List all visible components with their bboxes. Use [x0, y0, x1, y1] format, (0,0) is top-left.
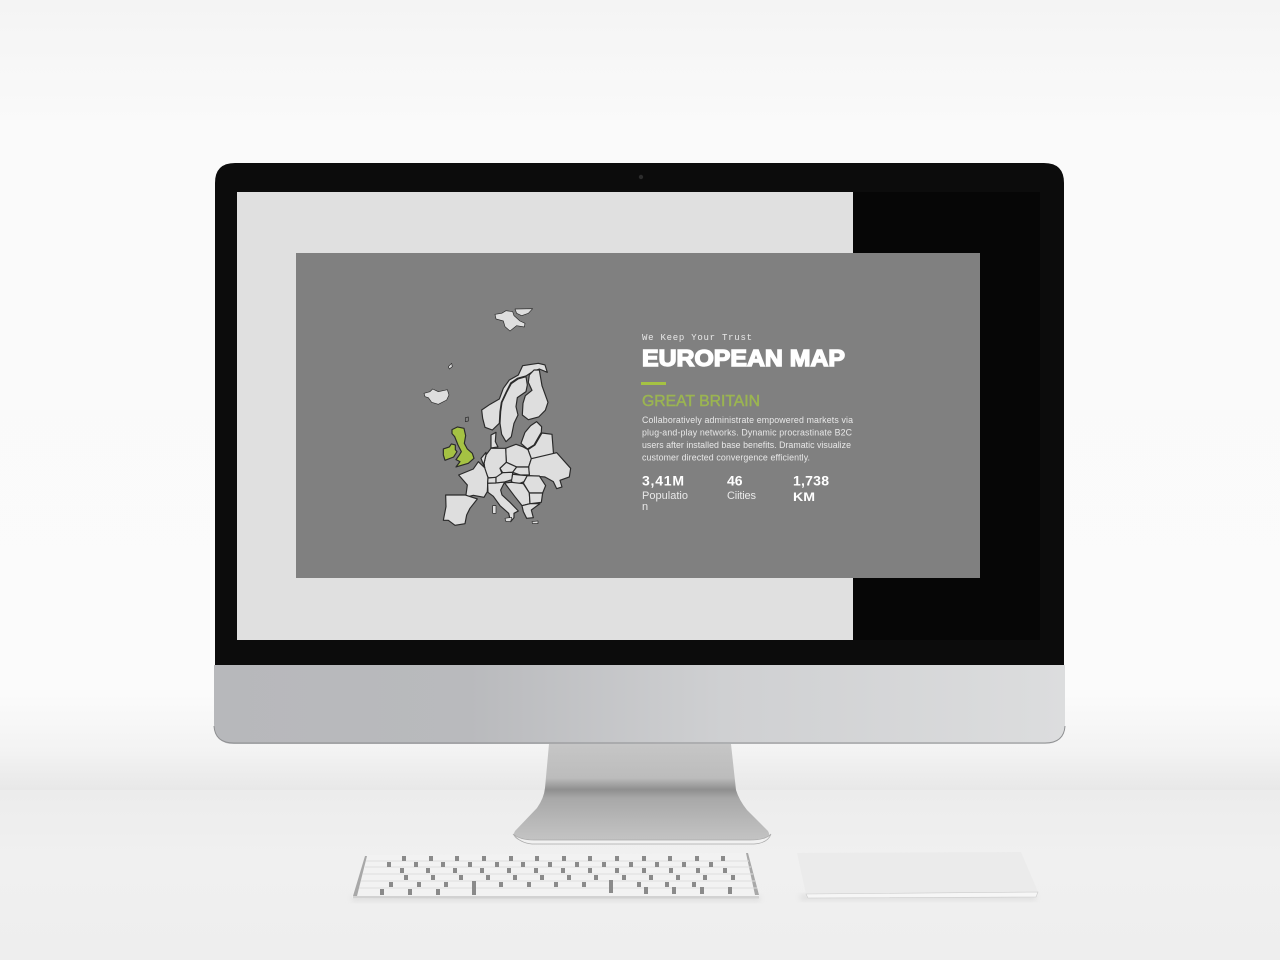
- Slovakia: [513, 467, 529, 475]
- stat: population: n: [642, 501, 648, 513]
- Belarus: [528, 433, 554, 459]
- keyboard shadow: [352, 896, 760, 901]
- key row lines: [359, 861, 757, 888]
- Sweden: [500, 377, 527, 442]
- Great Britain, highlighted: [452, 427, 474, 467]
- body copy: [642, 415, 853, 462]
- Bulgaria: [529, 493, 543, 504]
- trackpad front edge: [806, 892, 1038, 898]
- body copy: users after installed base benefits. Dramatic visualize: [642, 440, 851, 450]
- slide: light background panel: [237, 192, 853, 640]
- subtitle: GREAT BRITAIN: [642, 393, 760, 410]
- Hungary: [511, 474, 527, 484]
- Poland: [506, 444, 531, 467]
- Italy: [488, 482, 518, 522]
- stat: population: [642, 472, 688, 513]
- Sardinia: [493, 506, 496, 513]
- slide: grey content panel: [296, 253, 980, 578]
- Romania: [523, 476, 546, 493]
- Crete: [532, 521, 538, 524]
- Baltic states: [521, 422, 542, 449]
- Sicily: [505, 517, 512, 522]
- Svalbard: [495, 309, 533, 331]
- Jan Mayen: [448, 363, 452, 369]
- map of Europe: [424, 309, 571, 525]
- text block: [641, 333, 853, 513]
- Spain and Portugal: [443, 495, 477, 525]
- eyebrow: We Keep Your Trust: [642, 333, 752, 343]
- stand body: [514, 744, 769, 841]
- monitor: [214, 163, 1065, 744]
- stat: cities: [727, 472, 756, 502]
- stat: population: Populatio: [642, 490, 688, 502]
- keyboard side edges: [353, 853, 759, 896]
- trackpad shadow: [800, 895, 1036, 900]
- keyboard body: [352, 853, 759, 899]
- Austria: [496, 472, 513, 483]
- green accent bar: [641, 382, 666, 385]
- Germany: [484, 448, 506, 478]
- keyboard front edge: [353, 896, 759, 898]
- Switzerland: [488, 477, 496, 483]
- Shetland: [465, 417, 468, 422]
- Denmark: [491, 432, 498, 448]
- keyboard: [352, 853, 760, 901]
- stat: distance: [793, 472, 829, 504]
- key gaps: [380, 856, 735, 895]
- body copy: plug-and-play networks. Dynamic procrastinate B2C: [642, 428, 853, 438]
- Ireland, highlighted: [443, 444, 457, 460]
- stat: cities: Ciities: [727, 490, 756, 502]
- monitor chin: [214, 665, 1065, 744]
- camera: [639, 175, 643, 179]
- inner screen: [237, 192, 1040, 640]
- stat: distance: 1,738: [793, 472, 829, 488]
- background: desk: [0, 790, 1280, 960]
- Ukraine: [529, 453, 571, 489]
- Czechia: [500, 462, 517, 473]
- stat: population: 3,41M: [642, 472, 684, 488]
- title: EUROPEAN MAP: [642, 345, 845, 371]
- Finland: [522, 370, 548, 420]
- monitor stand: [513, 744, 771, 844]
- Greece: [522, 504, 540, 518]
- monitor bezel: [215, 163, 1064, 665]
- stat: cities: 46: [727, 472, 743, 488]
- chin bottom edge: [214, 726, 1065, 743]
- body copy: Collaboratively administrate empowered markets via: [642, 415, 853, 425]
- body copy: customer directed convergence efficiently.: [642, 452, 810, 462]
- Norway: [482, 363, 547, 430]
- Benelux: [481, 452, 486, 468]
- Iceland: [424, 389, 449, 404]
- stat: distance: KM: [793, 492, 815, 504]
- France: [459, 462, 488, 497]
- stand base edge: [513, 834, 771, 844]
- trackpad top: [797, 852, 1038, 894]
- Western Balkans: [505, 482, 530, 506]
- trackpad: [797, 852, 1038, 900]
